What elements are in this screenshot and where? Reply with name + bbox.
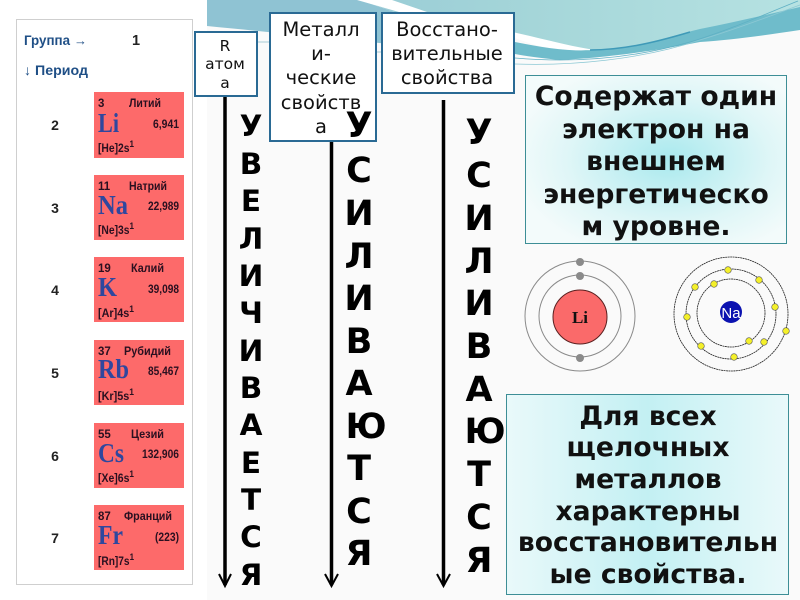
box: metallic properties: свойств — [281, 91, 361, 114]
callout: one outer electron: электрон на — [562, 114, 750, 145]
element cell: lithium: 1 — [130, 139, 134, 149]
vertical text: увеличивается: Я — [240, 558, 262, 592]
period numbers — [51, 117, 59, 546]
sodium label: Na — [721, 305, 741, 322]
period numbers: 4 — [51, 282, 59, 298]
vertical text: увеличивается: Е — [241, 184, 261, 218]
callout: reducing properties: металлов — [574, 464, 722, 495]
element cell: francium: 87 — [98, 511, 111, 523]
element cell: francium: 1 — [130, 552, 134, 562]
element cell: sodium: 22,989 — [148, 201, 179, 213]
element cell: sodium: Натрий — [129, 181, 167, 193]
box: metallic properties: Металл — [282, 18, 360, 41]
element cell: caesium: 55 — [98, 429, 111, 441]
arrow: reducing properties — [437, 100, 450, 586]
vertical text: усиливаются (metallic) — [344, 106, 387, 574]
panel: periodic table column — [16, 20, 192, 584]
vertical text: усиливаются (reducing): С — [466, 156, 492, 196]
element cell: sodium — [94, 175, 184, 240]
lithium nucleus — [553, 290, 607, 344]
background — [207, 0, 800, 600]
element cell: francium: [Rn]7s — [98, 556, 134, 568]
element cell: caesium: [Xe]6s — [98, 473, 133, 485]
vertical text: усиливаются (reducing): Л — [464, 242, 494, 282]
element cell: lithium: 6,941 — [153, 119, 180, 131]
box: metallic properties — [270, 13, 376, 141]
callout: one outer electron — [526, 76, 786, 244]
vertical text: усиливаются (metallic): Я — [346, 534, 372, 574]
element cell: lithium: 3 — [98, 98, 104, 110]
vertical text: увеличивается: У — [240, 109, 262, 143]
diagram: lithium atom — [525, 258, 635, 371]
vertical text: усиливаются (metallic): Ю — [345, 407, 387, 447]
vertical text: усиливаются (metallic): Л — [344, 237, 374, 277]
vertical text: усиливаются (reducing): Ю — [464, 412, 506, 452]
callout: one outer electron: Содержат один — [535, 81, 777, 112]
element cell: rubidium — [94, 340, 184, 405]
vertical text: увеличивается: Л — [239, 222, 263, 256]
callout: reducing properties: характерны — [555, 496, 741, 527]
element cell: potassium: 19 — [98, 263, 111, 275]
element cell: lithium — [94, 92, 184, 158]
vertical text: усиливаются (metallic): У — [346, 106, 372, 146]
vertical text: усиливаются (metallic): С — [346, 151, 372, 191]
vertical text: увеличивается: Ч — [239, 296, 263, 330]
element cell: potassium: K — [98, 272, 117, 302]
vertical text: увеличивается: Т — [241, 483, 261, 517]
period numbers: 7 — [51, 530, 59, 546]
sodium electrons — [684, 267, 789, 360]
arrow: atomic radius — [219, 96, 231, 586]
period numbers: 3 — [51, 200, 59, 216]
vertical text: увеличивается: В — [240, 147, 262, 181]
element cell: lithium: Li — [98, 108, 119, 138]
vertical text: усиливаются (metallic): Т — [347, 449, 371, 489]
callout: reducing properties: Для всех — [579, 401, 717, 432]
vertical text: усиливаются (reducing) — [464, 113, 506, 581]
vertical text: усиливаются (reducing): В — [466, 327, 492, 367]
callout: reducing properties — [506, 394, 788, 594]
element cell: francium: Fr — [98, 520, 123, 550]
vertical text: усиливаются (metallic): И — [344, 194, 374, 234]
group number: 1 — [132, 33, 140, 49]
element cell: sodium: [Ne]3s — [98, 225, 133, 237]
element cell: francium: Франций — [124, 511, 172, 523]
vertical text: усиливаются (reducing): И — [464, 284, 494, 324]
lithium label: Li — [572, 308, 588, 327]
element cell: rubidium: Rb — [98, 354, 129, 384]
box: reducing properties: Восстано- — [396, 18, 498, 41]
decorative wave header — [207, 0, 800, 64]
element cell: rubidium: 85,467 — [148, 366, 179, 378]
element cell: rubidium: 37 — [98, 346, 111, 358]
vertical text: усиливаются (reducing): И — [464, 199, 494, 239]
vertical text: увеличивается: Е — [241, 446, 261, 480]
vertical text: усиливаются (metallic): В — [346, 322, 372, 362]
element cell: lithium: Литий — [129, 98, 161, 110]
element cell: potassium: [Ar]4s — [98, 308, 131, 320]
period numbers: 5 — [51, 365, 59, 381]
diagram: sodium atom — [674, 257, 789, 371]
lithium electrons — [576, 258, 584, 362]
vertical text: усиливаются (reducing): С — [466, 498, 492, 538]
element cell: caesium: Цезий — [131, 429, 164, 441]
vertical text: усиливаются (metallic): А — [345, 364, 373, 404]
element cell: sodium: Na — [98, 190, 128, 220]
box: reducing properties — [382, 13, 514, 93]
callout: one outer electron: энергетическо — [543, 179, 769, 210]
element cell: rubidium: [Kr]5s — [98, 391, 131, 403]
box: atomic radius: атом — [205, 55, 245, 73]
period numbers: 2 — [51, 117, 59, 133]
element cell: rubidium: 1 — [129, 387, 134, 397]
element cell: potassium — [94, 257, 184, 322]
element cell: caesium: 132,906 — [142, 449, 179, 461]
period numbers: 6 — [51, 448, 59, 464]
vertical text: усиливаются (reducing): Я — [466, 541, 492, 581]
element cell: caesium: Cs — [98, 438, 124, 468]
element cell: francium — [94, 505, 184, 570]
vertical text: увеличивается: С — [240, 520, 262, 554]
box: atomic radius — [195, 32, 257, 96]
element cell: potassium: 39,098 — [148, 284, 180, 296]
box: reducing properties: свойства — [401, 66, 493, 89]
heading: group: Группа — [24, 32, 70, 48]
element cell: francium: (223) — [155, 532, 179, 544]
vertical text: увеличивается: И — [239, 259, 263, 293]
element cell: lithium: [He]2s — [98, 143, 133, 155]
callout: one outer electron: м уровне. — [582, 211, 730, 242]
element cell: sodium: 1 — [130, 221, 134, 231]
heading: period: ↓ Период — [24, 62, 88, 78]
sodium nucleus — [720, 301, 742, 323]
element cell: sodium: 11 — [98, 181, 111, 193]
vertical text: усиливаются (metallic): С — [346, 492, 372, 532]
callout: reducing properties: щелочных — [566, 432, 730, 463]
element cell: potassium: Калий — [131, 263, 164, 275]
arrow: metallic properties — [325, 141, 338, 586]
box: metallic properties: а — [315, 115, 327, 138]
box: atomic radius: а — [220, 74, 230, 92]
vertical text: увеличивается: А — [240, 408, 263, 442]
vertical text: увеличивается: В — [240, 371, 262, 405]
vertical text: увеличивается — [239, 109, 263, 592]
box: atomic radius: R — [220, 37, 231, 55]
vertical text: усиливаются (reducing): У — [466, 113, 492, 153]
vertical text: усиливаются (metallic): И — [344, 279, 374, 319]
box: reducing properties: вительные — [391, 42, 503, 65]
group arrow: → — [74, 33, 87, 48]
element cell: caesium: 1 — [129, 469, 134, 479]
callout: reducing properties: восстановительн — [518, 527, 778, 558]
vertical text: усиливаются (reducing): Т — [467, 455, 491, 495]
vertical text: увеличивается: И — [239, 334, 263, 368]
element cell: caesium — [94, 423, 184, 488]
box: metallic properties: и- — [311, 42, 331, 65]
box: metallic properties: ческие — [286, 66, 356, 89]
callout: one outer electron: внешнем — [586, 146, 726, 177]
vertical text: усиливаются (reducing): А — [465, 370, 493, 410]
element cell: potassium: 1 — [129, 304, 134, 314]
element cell: rubidium: Рубидий — [124, 346, 171, 358]
callout: reducing properties: ые свойства. — [550, 559, 746, 590]
